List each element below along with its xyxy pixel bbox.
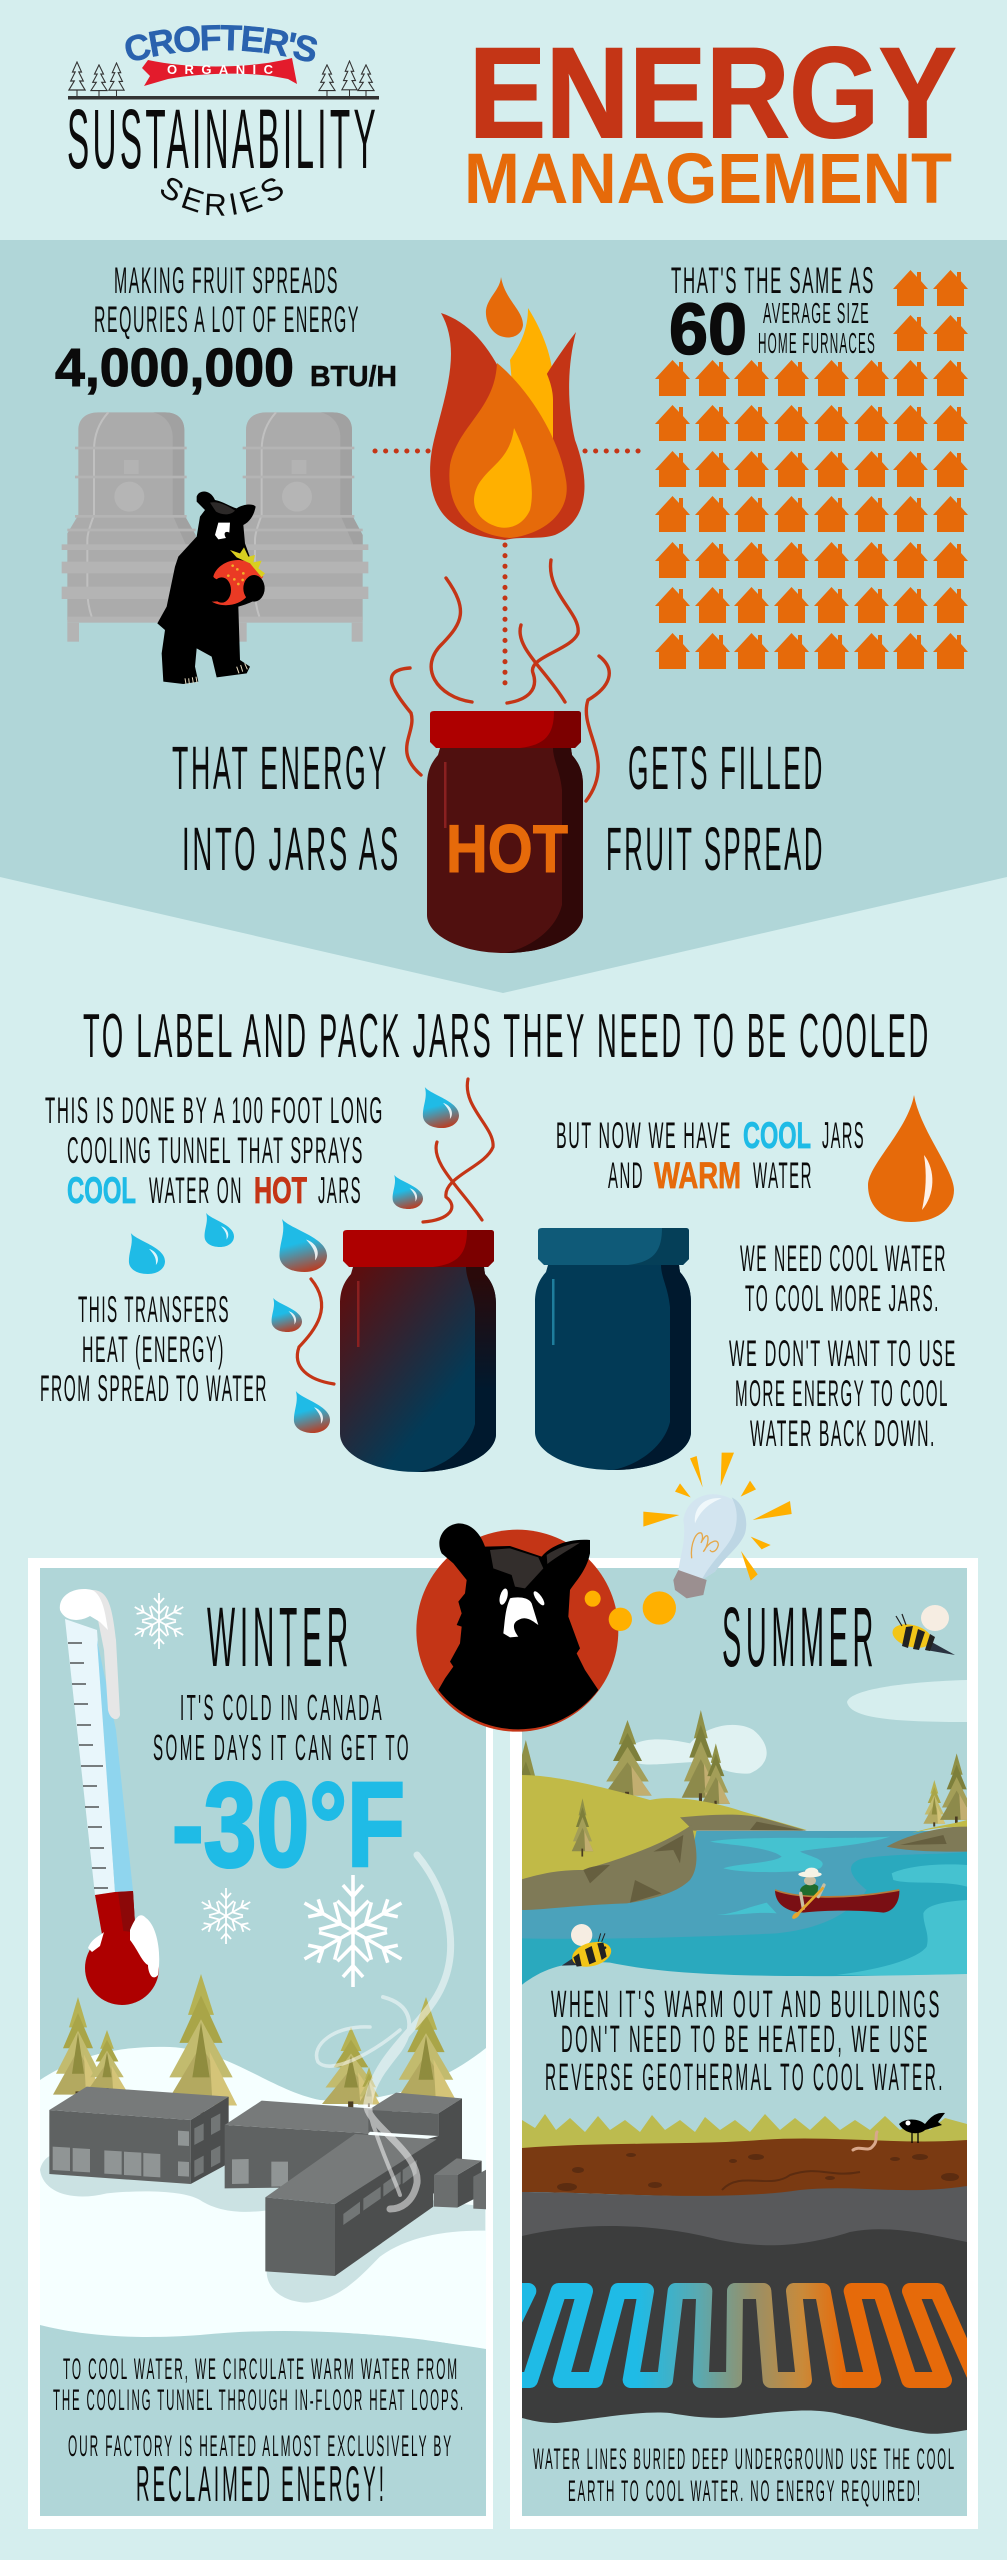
text block: cool jars warm water: WATER xyxy=(753,1155,813,1196)
winter snow ground xyxy=(40,2047,486,2349)
infographic: THAT ENERGY xyxy=(172,734,389,802)
text block: transfers heat: THIS TRANSFERS xyxy=(78,1289,230,1330)
infographic: AVERAGE SIZE xyxy=(763,298,870,330)
panel: summer xyxy=(497,1558,978,2529)
infographic: COOLING TUNNEL THAT SPRAYS xyxy=(67,1130,364,1171)
text block: cool jars warm water: WARM xyxy=(654,1155,741,1196)
logo: Crofter's Organic xyxy=(68,24,379,100)
infographic: MAKING FRUIT SPREADS xyxy=(114,260,339,301)
mascot: bear head thinking xyxy=(416,1523,676,1732)
worm xyxy=(853,2132,877,2150)
logo wordmark: CROFTER'S xyxy=(125,24,318,62)
soil layer xyxy=(522,2139,967,2196)
stat: -30F: -30°F xyxy=(172,1758,405,1892)
geothermal pipe xyxy=(500,2291,977,2380)
icon: big warm drop xyxy=(868,1095,954,1222)
winter trees xyxy=(53,1974,457,2114)
icon grid: 60 houses xyxy=(655,270,968,669)
infographic: SUSTAINABILITY xyxy=(67,92,379,186)
summer cloud xyxy=(847,1680,967,1722)
illustration: boilers xyxy=(62,412,368,642)
stat: 4,000,000: 4,000,000 xyxy=(55,338,294,398)
grass xyxy=(522,2114,967,2148)
factory buildings xyxy=(40,2087,487,2303)
panel: winter xyxy=(28,1558,493,2529)
infographic: INTO JARS AS xyxy=(182,815,401,883)
infographic: JARS xyxy=(822,1115,865,1156)
heading: series: SERIES xyxy=(161,178,283,216)
title: management: MANAGEMENT xyxy=(464,140,952,219)
text block: need cool water xyxy=(729,1238,957,1454)
text block: cooling tunnel: WATER ON xyxy=(149,1170,243,1211)
icon: light bulb xyxy=(643,1453,792,1598)
snow bank behind caption xyxy=(356,2334,448,2344)
logo ground line xyxy=(68,96,379,100)
icons: water drops xyxy=(129,1087,459,1433)
infographic: REQURIES A LOT OF ENERGY xyxy=(94,299,360,340)
bird xyxy=(899,2113,945,2143)
stat: 60: 60 xyxy=(669,290,747,370)
illustration: hot jar xyxy=(427,711,583,953)
icon: flame xyxy=(430,277,585,540)
panel: winter: WINTER xyxy=(207,1590,353,1684)
logo ribbon text: ORGANIC xyxy=(167,62,274,77)
infographic: FROM SPREAD TO WATER xyxy=(40,1368,268,1409)
infographic: THIS IS DONE BY A 100 FOOT LONG xyxy=(45,1090,384,1131)
icon: snowflakes xyxy=(131,1593,409,1987)
factory steam xyxy=(317,1855,451,2209)
canoe and paddler xyxy=(775,1868,899,1920)
jar label: HOT: HOT xyxy=(446,811,568,887)
text block: cooling tunnel: JARS xyxy=(318,1170,362,1211)
ground below lake xyxy=(522,1962,967,1985)
text block: transfers heat: HEAT (ENERGY) xyxy=(82,1329,225,1370)
panel: energy section band xyxy=(0,240,1007,993)
panel: winter: IT'S COLD IN CANADA xyxy=(180,1687,384,1728)
panel: winter: SOME DAYS IT CAN GET TO xyxy=(153,1727,411,1768)
steam: hot jar xyxy=(391,560,609,801)
stat unit: BTU/H: BTU/H xyxy=(310,361,397,393)
illustration: cooled jar xyxy=(535,1228,691,1470)
logo ribbon xyxy=(142,58,297,86)
dark bedrock layer xyxy=(522,2226,967,2434)
illustration: bear holding strawberry xyxy=(157,491,265,684)
logo trees xyxy=(69,61,374,96)
text block: cooling tunnel xyxy=(45,1090,384,1211)
text block: transfers heat xyxy=(40,1289,268,1409)
lower bee xyxy=(562,1924,612,1967)
illustration: jar cooling xyxy=(340,1230,496,1472)
text block: cooling tunnel: COOL xyxy=(67,1170,136,1211)
text block: cool jars warm water: BUT NOW WE HAVE xyxy=(556,1115,732,1156)
title: energy: ENERGY xyxy=(469,22,956,165)
text block: cool jars warm water xyxy=(556,1115,865,1196)
text block: cool jars warm water: AND xyxy=(608,1155,644,1196)
gray rock layer xyxy=(522,2186,967,2250)
lake scene xyxy=(497,1710,973,2000)
text block: cool jars warm water: COOL xyxy=(743,1115,811,1156)
upper bee xyxy=(890,1605,955,1655)
steam: cooling jar xyxy=(297,1079,493,1384)
icon: thermometer xyxy=(60,1589,159,2005)
text block: cooling tunnel: HOT xyxy=(254,1170,307,1211)
dotted connectors xyxy=(375,451,640,690)
panel: winter: RECLAIMED ENERGY! xyxy=(136,2456,387,2512)
